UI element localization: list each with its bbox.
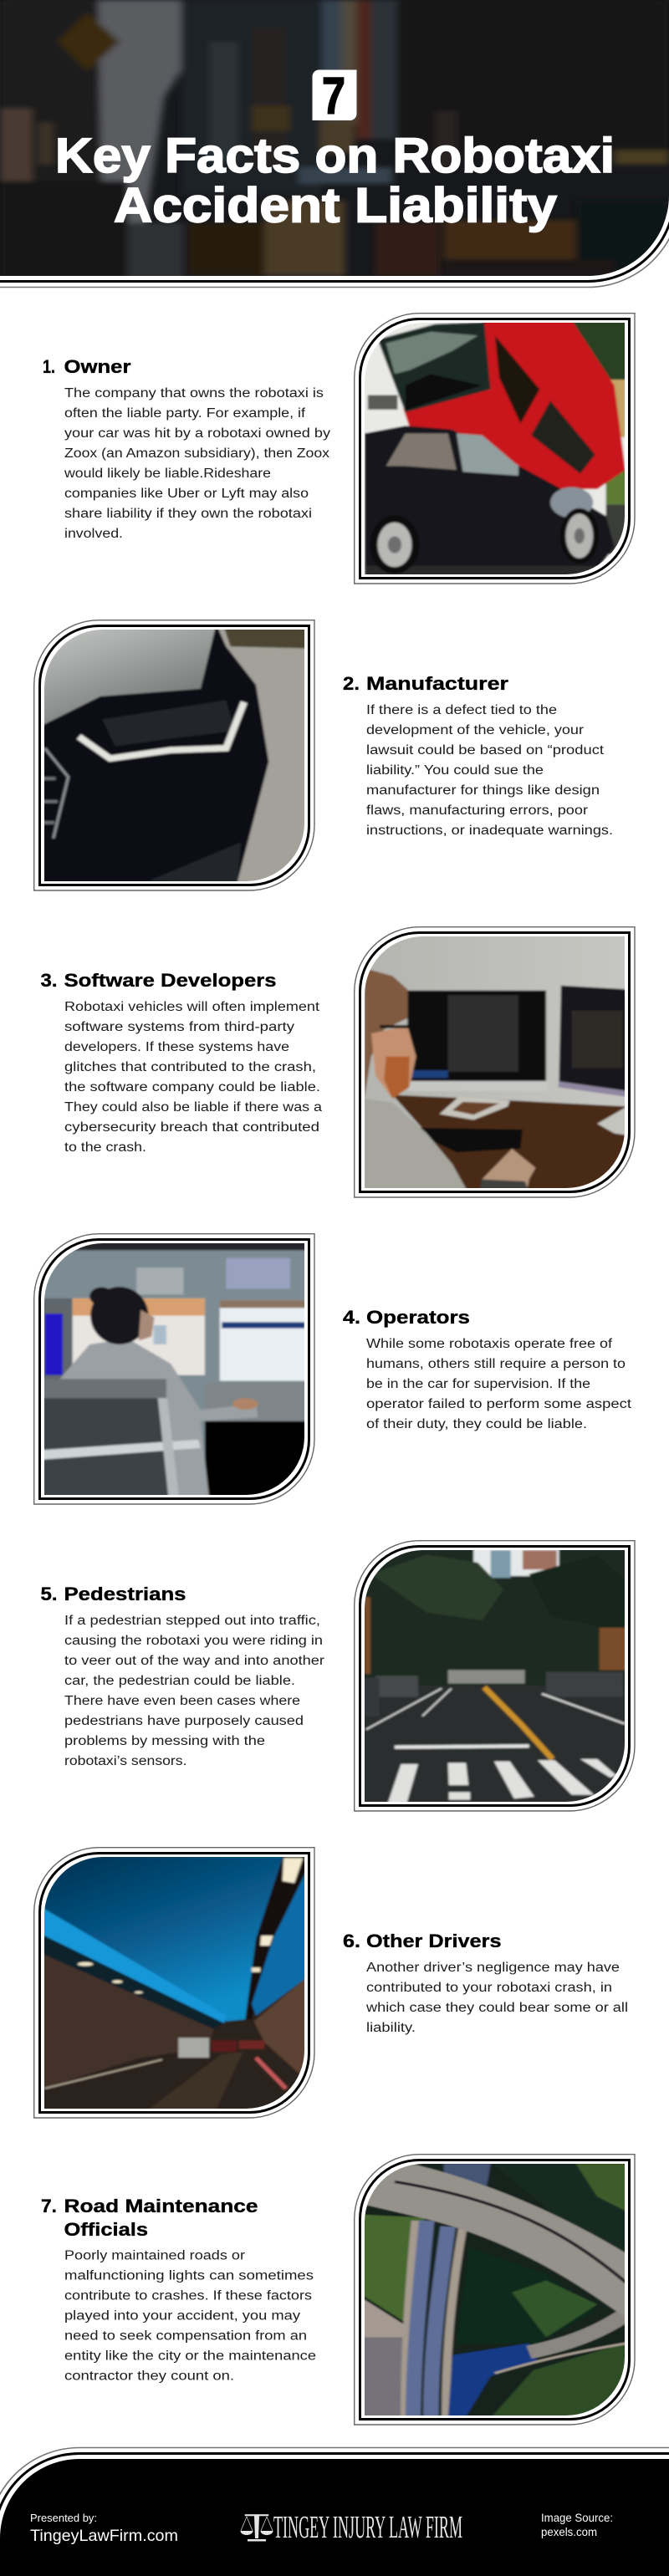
body text: software developers: software systems from third-party	[64, 1020, 294, 1034]
body text: operators: humans, others still require a person to	[366, 1357, 626, 1371]
body text: manufacturer: manufacturer for things like design	[366, 783, 600, 798]
photo frame border	[355, 927, 635, 1197]
body text: pedestrians: problems by messing with the	[64, 1734, 265, 1748]
body text: manufacturer: lawsuit could be based on “product	[366, 743, 605, 757]
body text: pedestrians: car, the pedestrian could be liable.	[64, 1674, 295, 1688]
body text: software developers: glitches that contributed to the crash,	[64, 1060, 316, 1074]
body text: operators: of their duty, they could be liable.	[366, 1417, 587, 1431]
item 1: owner text	[43, 356, 330, 541]
body text: manufacturer	[366, 703, 613, 838]
footer: TINGEY INJURY LAW FIRM	[273, 2510, 462, 2545]
body text: owner	[64, 386, 330, 541]
heading: 6. Other Drivers: Other Drivers	[366, 1931, 502, 1951]
item 2: manufacturer text	[343, 673, 613, 838]
body text: road maintenance officials: need to seek compensation from an	[64, 2329, 307, 2343]
body text: road maintenance officials: played into your accident, you may	[64, 2309, 300, 2323]
body text: road maintenance officials: entity like the city or the maintenance	[64, 2349, 316, 2363]
body text: road maintenance officials: contribute to crashes. If these factors	[64, 2289, 312, 2303]
image source: Image Source:	[541, 2512, 613, 2524]
body text: other drivers	[365, 1961, 628, 2035]
body text: manufacturer: instructions, or inadequate warnings.	[366, 824, 613, 838]
item 4: operators text	[343, 1307, 632, 1431]
body text: pedestrians: If a pedestrian stepped out into traffic,	[64, 1614, 320, 1628]
presented by: TingeyLawFirm.com	[30, 2527, 178, 2545]
presented by	[30, 2512, 178, 2545]
body text: other drivers: contributed to your robotaxi crash, in	[366, 1981, 612, 1995]
item 6: other drivers text	[343, 1931, 628, 2035]
body text: software developers	[64, 1000, 322, 1155]
body text: operators	[366, 1337, 632, 1431]
body text: software developers: They could also be liable if there was a	[64, 1100, 322, 1115]
body text: manufacturer: liability.” You could sue the	[366, 763, 544, 778]
photo frame border	[34, 1848, 314, 2118]
photo frame border	[355, 314, 635, 584]
body text: other drivers: which case they could bear some or all	[365, 2001, 628, 2015]
body text: pedestrians: pedestrians have purposely caused	[64, 1714, 304, 1728]
heading: 7. Road Maintenance Officials	[41, 2196, 258, 2240]
number badge 7	[313, 68, 356, 125]
title: Key Facts on Robotaxi	[55, 129, 615, 183]
title: Accident Liability	[114, 179, 557, 232]
heading: 3. Software Developers: Software Developers	[64, 970, 276, 991]
body text: software developers: cybersecurity breach that contributed	[64, 1120, 319, 1135]
body text: owner: would likely be liable.Rideshare	[64, 467, 271, 481]
framed photo 2: black car headlight	[34, 620, 314, 890]
header double border lines	[0, 195, 669, 288]
body text: pedestrians	[64, 1614, 324, 1768]
body text: software developers: to the crash.	[64, 1140, 146, 1155]
photo frame border	[34, 620, 314, 890]
framed photo 5: tree-lined street with crosswalk	[355, 1541, 635, 1811]
presented by: Presented by:	[30, 2512, 97, 2524]
heading: 4. Operators: 4.	[343, 1307, 360, 1328]
framed photo 7: aerial highway overpass	[355, 2155, 635, 2425]
footer	[0, 2448, 669, 2576]
body text: road maintenance officials	[64, 2249, 316, 2383]
heading: 7. Road Maintenance Officials: 7.	[41, 2196, 57, 2216]
body text: owner: The company that owns the robotaxi is	[64, 386, 324, 400]
item 5: pedestrians text	[40, 1584, 324, 1768]
body text: road maintenance officials: contractor they count on.	[64, 2369, 234, 2383]
heading: 4. Operators: Operators	[366, 1307, 470, 1328]
heading: 1. Owner: 1.	[43, 356, 55, 377]
body text: software developers: Robotaxi vehicles will often implement	[64, 1000, 320, 1014]
body text: owner: share liability if they own the robotaxi	[64, 507, 312, 521]
body text: operators: be in the car for supervision. If the	[366, 1377, 590, 1391]
photo frame border	[355, 2155, 635, 2425]
framed photo 4: woman at office monitors	[34, 1234, 314, 1504]
body text: manufacturer: flaws, manufacturing errors, poor	[366, 803, 588, 818]
body text: operators: While some robotaxis operate free of	[366, 1337, 613, 1351]
body text: owner: your car was hit by a robotaxi owned by	[64, 426, 330, 441]
body text: road maintenance officials: Poorly maintained roads or	[64, 2249, 245, 2262]
framed photo 1: red car crashed on black car	[355, 314, 635, 584]
framed photo 3: developer at monitors	[355, 927, 635, 1197]
footer black panel	[0, 2459, 669, 2576]
body text: owner: Zoox (an Amazon subsidiary), then Zoox	[64, 446, 329, 461]
body text: software developers: the software company could be liable.	[64, 1080, 320, 1094]
body text: road maintenance officials: malfunctioning lights can sometimes	[64, 2269, 314, 2283]
heading: 3. Software Developers: 3.	[40, 970, 57, 991]
number badge 7: 7	[322, 68, 345, 125]
body text: pedestrians: robotaxi’s sensors.	[64, 1754, 187, 1768]
body text: owner: involved.	[64, 527, 123, 541]
body text: pedestrians: causing the robotaxi you were riding in	[64, 1634, 323, 1648]
title	[55, 129, 615, 232]
photo frame border	[355, 1541, 635, 1811]
body text: pedestrians: to veer out of the way and into another	[64, 1654, 324, 1668]
body text: manufacturer: development of the vehicle, your	[366, 723, 584, 737]
footer double border lines	[0, 2448, 669, 2538]
heading: 5. Pedestrians: Pedestrians	[64, 1584, 186, 1604]
body text: manufacturer: If there is a defect tied to the	[366, 703, 557, 717]
body text: other drivers: Another driver’s negligence may have	[366, 1961, 620, 1975]
body text: operators: operator failed to perform some aspect	[366, 1397, 632, 1411]
body text: other drivers: liability.	[366, 2021, 416, 2035]
heading: 7. Road Maintenance Officials: Road Maintenance	[64, 2196, 258, 2216]
heading: 1. Owner	[43, 356, 131, 377]
body text: owner: often the liable party. For example, if	[64, 406, 306, 421]
header background photo: city street	[0, 0, 669, 284]
framed photo 6: blue lit tunnel	[34, 1848, 314, 2118]
heading: 7. Road Maintenance Officials: Officials	[64, 2219, 148, 2240]
item 7: road maintenance officials text	[41, 2196, 316, 2383]
heading: 2. Manufacturer: 2.	[343, 673, 360, 694]
heading: 6. Other Drivers: 6.	[343, 1931, 360, 1951]
image source: pexels.com	[541, 2526, 597, 2538]
body text: pedestrians: There have even been cases where	[64, 1694, 300, 1708]
heading: 2. Manufacturer: Manufacturer	[366, 673, 508, 694]
item 3: software developers text	[40, 970, 322, 1155]
body text: owner: companies like Uber or Lyft may also	[64, 487, 309, 501]
photo frame border	[34, 1234, 314, 1504]
body text: software developers: developers. If these systems have	[64, 1040, 289, 1054]
image source	[541, 2512, 613, 2538]
heading: 5. Pedestrians: 5.	[40, 1584, 57, 1604]
heading: 1. Owner: Owner	[64, 356, 131, 377]
icon: scales of justice	[241, 2515, 273, 2542]
header banner	[0, 0, 669, 288]
